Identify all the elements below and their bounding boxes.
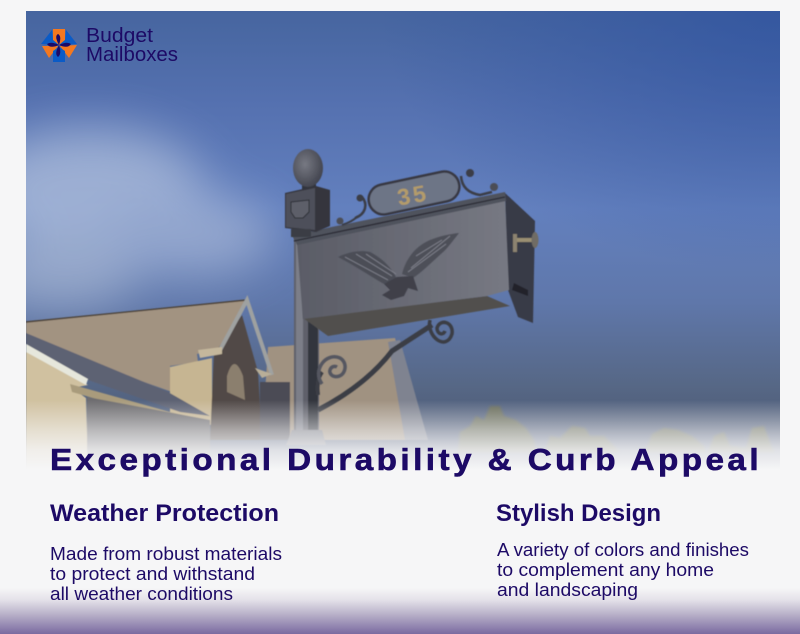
text block: stylish design: and landscaping (497, 580, 638, 600)
house number plate (336, 169, 498, 225)
gable trim (220, 300, 272, 375)
mailbox box (292, 192, 538, 336)
heading: weather protection: Weather Protection (50, 500, 279, 527)
text block: stylish design: to complement any home (497, 560, 714, 580)
heading: stylish design: Stylish Design (496, 500, 661, 527)
clouds (0, 128, 275, 310)
house number: 35 (395, 179, 431, 211)
fade into page (20, 400, 790, 470)
text block: stylish design (497, 540, 749, 600)
logo wordmark: Mailboxes (86, 44, 178, 66)
lid (292, 192, 506, 245)
cream wall under roof (170, 358, 212, 425)
photo: mailbox against sky and houses (0, 11, 790, 482)
text block: weather protection (50, 544, 282, 604)
sky (26, 11, 780, 481)
panel: weather protection (50, 500, 282, 604)
grey roof (26, 333, 210, 416)
icon: logo mark (41, 29, 77, 62)
houses (26, 300, 428, 470)
text block: stylish design: A variety of colors and finishes (497, 540, 749, 560)
title: Exceptional Durability & Curb Appeal (50, 442, 762, 477)
bottom gradient band (0, 588, 800, 634)
finial post cap (285, 149, 330, 237)
logo wordmark (86, 25, 178, 66)
left house tan roof (26, 300, 247, 392)
solid lower edge (26, 470, 780, 481)
cream lower wall (26, 350, 88, 470)
text block: weather protection: to protect and withstand (50, 564, 255, 584)
side panel (505, 193, 535, 323)
panel: stylish design (496, 500, 749, 600)
front panel (297, 199, 509, 319)
distant trees (460, 405, 769, 445)
icon: eagle relief (338, 233, 459, 300)
stone gable (210, 315, 262, 440)
white fascia (26, 344, 88, 385)
shaded wall (86, 397, 210, 440)
underside (303, 296, 510, 336)
text block: weather protection: Made from robust materials (50, 544, 282, 564)
side latch (513, 234, 517, 252)
logo (41, 25, 178, 66)
logo wordmark: Budget (86, 25, 153, 47)
mailbox post and bracket (286, 232, 452, 445)
right house roof (265, 338, 405, 440)
text block: weather protection: all weather conditions (50, 584, 233, 604)
